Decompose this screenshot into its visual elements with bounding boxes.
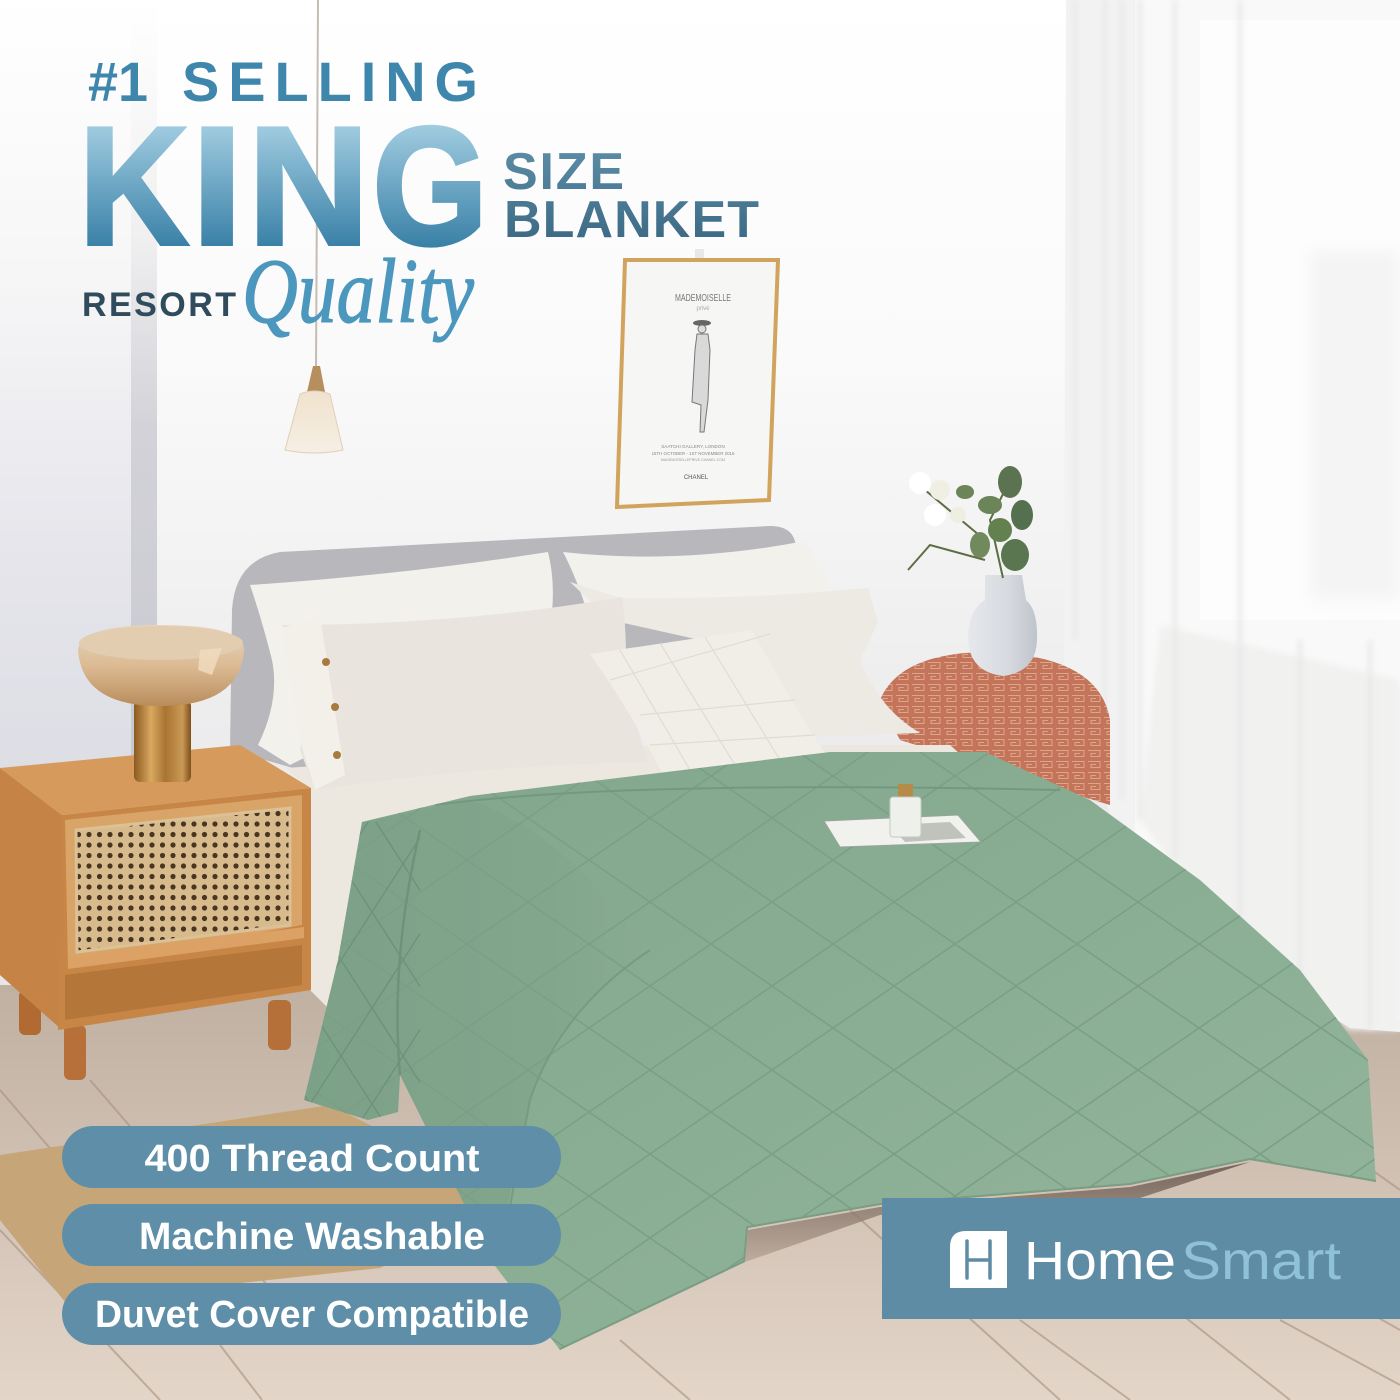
pillow right xyxy=(570,582,920,738)
brand icon xyxy=(950,1231,1007,1288)
brand name smart: Smart xyxy=(1181,1231,1341,1291)
hanging lamp xyxy=(285,0,343,453)
pillow back right xyxy=(563,541,832,640)
brand panel xyxy=(882,1198,1400,1319)
wooden floor xyxy=(0,985,1400,1400)
perfume bottle xyxy=(890,784,921,837)
cane panel xyxy=(76,808,290,952)
lamp fitting xyxy=(307,366,325,392)
plant stems and leaves xyxy=(908,466,1033,578)
pillow flap with buttons xyxy=(282,616,345,790)
blanket side shading xyxy=(304,800,650,1266)
nightstand xyxy=(0,745,311,1080)
magazine xyxy=(824,815,981,847)
nightstand drawer frame xyxy=(65,795,302,968)
round table cloth xyxy=(880,652,1110,805)
feature pills xyxy=(62,1126,561,1345)
size word: SIZE xyxy=(503,143,624,201)
mattress xyxy=(285,745,1000,1010)
#1 label: #1 xyxy=(88,50,148,113)
poster link: MADEMOISELLEPRIVE.CHANEL.COM xyxy=(661,458,725,462)
pill: thread count: 400 Thread Count xyxy=(144,1138,480,1180)
blanket body xyxy=(304,752,1376,1350)
king word: K xyxy=(79,92,188,280)
green quilted blanket xyxy=(300,750,1380,1360)
curtains xyxy=(1064,0,1400,1032)
nightstand front xyxy=(58,788,311,1030)
framed poster xyxy=(617,249,778,507)
king word: G xyxy=(373,92,488,280)
pill: washable: Machine Washable xyxy=(139,1216,485,1258)
bed xyxy=(230,526,1000,1010)
nightstand top xyxy=(0,745,311,815)
lamp base xyxy=(134,700,191,782)
lamp shade xyxy=(285,391,343,453)
king word: N xyxy=(248,92,369,280)
poster frame xyxy=(617,260,778,507)
nightstand side xyxy=(0,768,62,1030)
lamp highlight xyxy=(198,648,222,675)
background wall xyxy=(0,0,1400,1010)
pill: duvet compatible xyxy=(62,1283,561,1345)
poster figure xyxy=(692,320,711,432)
lamp bowl xyxy=(78,625,244,706)
lamp bowl rim xyxy=(79,626,243,660)
shadow under bed xyxy=(745,1162,1250,1262)
selling label: SELLING xyxy=(182,50,487,113)
pill: thread count xyxy=(62,1126,561,1188)
quilting xyxy=(300,750,1380,1360)
open shelf xyxy=(65,945,302,1020)
pillow front xyxy=(282,597,648,790)
drawer lip xyxy=(68,927,304,969)
side table with vase xyxy=(880,466,1110,805)
headboard xyxy=(230,526,810,770)
poster caption: SAATCHI GALLERY, LONDON xyxy=(661,444,725,449)
king word xyxy=(79,92,488,280)
resort word: RESORT xyxy=(82,286,236,324)
poster subtitle: privé xyxy=(696,306,710,312)
headline xyxy=(79,50,759,342)
poster title: MADEMOISELLE xyxy=(675,293,731,304)
pill: duvet compatible: Duvet Cover Compatible xyxy=(95,1294,529,1336)
nightstand legs xyxy=(19,990,291,1080)
rug xyxy=(0,1105,500,1302)
quality script: Quality xyxy=(242,240,474,342)
brand background xyxy=(882,1198,1400,1319)
lamp cord xyxy=(316,0,318,368)
pill: washable xyxy=(62,1204,561,1266)
small quilted cushion xyxy=(590,630,828,773)
brand name home: Home xyxy=(1024,1231,1176,1291)
poster dates: 16TH OCTOBER - 1ST NOVEMBER 2015 xyxy=(652,451,735,456)
pillow back left xyxy=(250,552,553,765)
king word: I xyxy=(191,92,243,280)
poster brand: CHANEL xyxy=(684,475,709,481)
table lamp xyxy=(78,625,244,782)
poster hook xyxy=(695,249,704,261)
vase xyxy=(968,575,1037,676)
blanket word: BLANKET xyxy=(504,191,759,249)
